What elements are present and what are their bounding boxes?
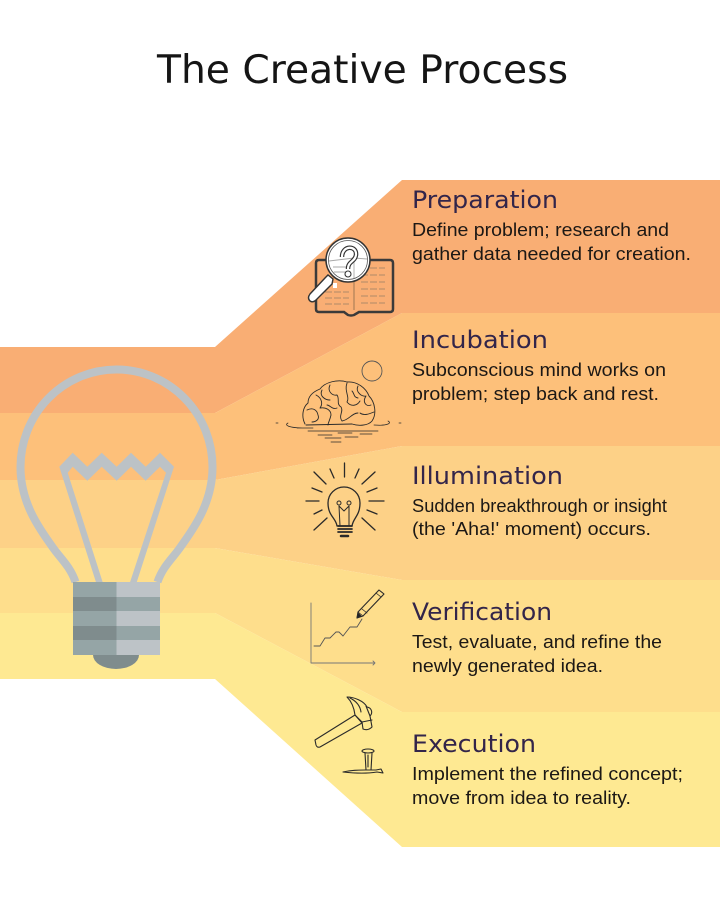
text: execution <box>412 730 683 808</box>
band: illumination <box>0 446 720 580</box>
large light bulb <box>20 370 212 669</box>
description: preparation: Define problem; research and <box>412 220 669 240</box>
text: illumination <box>412 462 667 539</box>
heading: execution: Execution <box>412 730 536 758</box>
description: preparation: gather data needed for creation. <box>412 244 691 264</box>
icon: book and magnifier <box>308 238 393 316</box>
icon: hammer and nail <box>315 697 383 773</box>
description: illumination: (the 'Aha!' moment) occurs. <box>412 519 651 539</box>
description: incubation: problem; step back and rest. <box>412 384 659 404</box>
text: verification <box>412 598 662 676</box>
heading: preparation: Preparation <box>412 186 558 214</box>
description: verification: Test, evaluate, and refine the <box>412 632 662 652</box>
band: preparation <box>0 180 720 413</box>
band: verification <box>0 548 720 712</box>
description: incubation: Subconscious mind works on <box>412 360 666 380</box>
icon: brain in water <box>276 361 401 442</box>
heading: incubation: Incubation <box>412 326 548 354</box>
description: verification: newly generated idea. <box>412 656 603 676</box>
description: execution: Implement the refined concept; <box>412 764 683 784</box>
band: incubation <box>0 313 720 480</box>
icon: small light bulb with rays <box>306 463 384 536</box>
description: execution: move from idea to reality. <box>412 788 631 808</box>
text: preparation <box>412 186 691 264</box>
title: The Creative Process <box>156 48 568 93</box>
heading: verification: Verification <box>412 598 552 626</box>
band: execution <box>0 613 720 847</box>
heading: illumination: Illumination <box>412 462 563 490</box>
description: illumination: Sudden breakthrough or insight <box>412 496 667 516</box>
text: incubation <box>412 326 666 404</box>
icon: pencil drawing a rising graph <box>311 590 384 665</box>
